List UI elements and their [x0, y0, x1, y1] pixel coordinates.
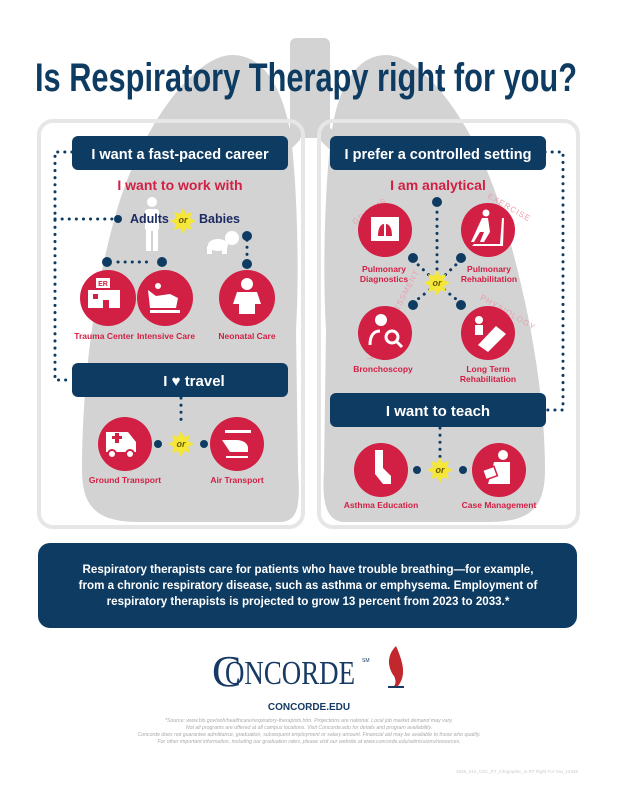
icon: long term rehab: [461, 306, 515, 360]
arc labels: GRAPHS: [351, 196, 388, 226]
lungs background: [82, 38, 545, 522]
or star travel: or: [176, 439, 186, 449]
icon: asthma education: [354, 443, 408, 497]
adults or babies: [130, 208, 240, 234]
heading: controlled setting: [330, 136, 546, 170]
heading: travel: [72, 363, 288, 397]
icon: air transport: [210, 417, 264, 471]
arc labels: [351, 191, 537, 362]
icon: bronchoscopy: [358, 306, 412, 360]
panel: right: Pulmonary: [362, 264, 406, 274]
labels row 1: Trauma Center: [74, 331, 134, 341]
or star analytical: or: [432, 278, 442, 288]
or star analytical: [424, 270, 450, 296]
icon: pulmonary diagnostics: [358, 203, 412, 257]
panel: left: Air Transport: [210, 475, 264, 485]
panel: right: Diagnostics: [360, 274, 408, 284]
panel: right: Rehabilitation: [460, 374, 516, 384]
heading: teach: I want to teach: [386, 403, 490, 420]
logo: Concorde: C: [212, 647, 241, 696]
or star teach: [427, 457, 453, 483]
fine print: *Source: www.bls.gov/ooh/healthcare/respiratory-therapists.htm. Projections are national. Local job market demand may vary.: [165, 718, 453, 724]
fine print: Not all programs are offered at all campus locations. Visit Concorde.edu for details and program availability.: [186, 725, 432, 731]
info box: Respiratory therapists care for patients who have trouble breathing—for example,: [83, 563, 533, 576]
icon: neonatal care: [219, 270, 275, 326]
labels row 1: Intensive Care: [137, 331, 195, 341]
heading: teach: [330, 393, 546, 427]
arc labels: VISUAL ASSESSMENT: [366, 268, 421, 362]
panel: right: [319, 121, 578, 527]
or star travel: [168, 431, 194, 457]
adults or babies: or: [178, 215, 188, 225]
logo: Concorde: SM: [362, 658, 370, 664]
subheading: work with: I want to work with: [117, 177, 243, 193]
fine print: For other important information, including our graduation rates, please visit our website at www.concorde.edu/admissions/resources.: [157, 739, 461, 745]
panel: right: Long Term: [466, 364, 510, 374]
icon: adult: [145, 197, 159, 251]
fine print: Concorde does not guarantee admittance, graduation, subsequent employment or salary amount. Financial aid may be available to those who qualify.: [137, 732, 481, 738]
fine print: [137, 718, 481, 745]
info box: respiratory therapists is projected to grow 13 percent from 2023 to 2033.*: [107, 595, 510, 608]
info box: from a chronic respiratory disease, such as asthma or emphysema. Employment of: [79, 579, 538, 592]
heading: fast-paced: [72, 136, 288, 170]
panel: right: Bronchoscopy: [353, 364, 413, 374]
heading: controlled setting: I prefer a controlled setting: [345, 147, 531, 163]
heading: travel: I ♥ travel: [163, 373, 225, 390]
logo: Concorde: ONCORDE: [225, 655, 355, 692]
panel: right: Asthma Education: [344, 500, 418, 510]
or star teach: or: [436, 465, 445, 475]
labels row 1: Neonatal Care: [218, 331, 276, 341]
adults or babies: Babies: [199, 212, 240, 226]
info box: [38, 543, 577, 628]
icon: case management: [472, 443, 526, 497]
icon: ground transport: [98, 417, 152, 471]
panel: left: [39, 121, 303, 527]
icon: trauma center: [80, 270, 136, 326]
icon: trauma center: ER: [98, 281, 108, 288]
file code: 2025_212_CSC_RT_Infographic_Is RT Right For You_12345: [456, 769, 578, 774]
arc labels: EXERCISE: [486, 191, 532, 223]
panel: right: Case Management: [462, 500, 536, 510]
icon: intensive care: [137, 270, 193, 326]
panel: right: Rehabilitation: [461, 274, 517, 284]
logo: Concorde: [212, 646, 404, 696]
heading: fast-paced: I want a fast-paced career: [91, 147, 269, 163]
adults or babies: Adults: [130, 212, 169, 226]
arc labels: PHYSIOLOGY: [479, 293, 537, 332]
subheading: analytical: I am analytical: [390, 177, 486, 193]
icon: baby: [207, 231, 239, 254]
panel: left: Ground Transport: [89, 475, 161, 485]
labels row 1: [74, 331, 276, 341]
url: CONCORDE.EDU: [268, 702, 350, 713]
icon: pulmonary rehab: [461, 203, 515, 257]
panel: right: Pulmonary: [467, 264, 511, 274]
